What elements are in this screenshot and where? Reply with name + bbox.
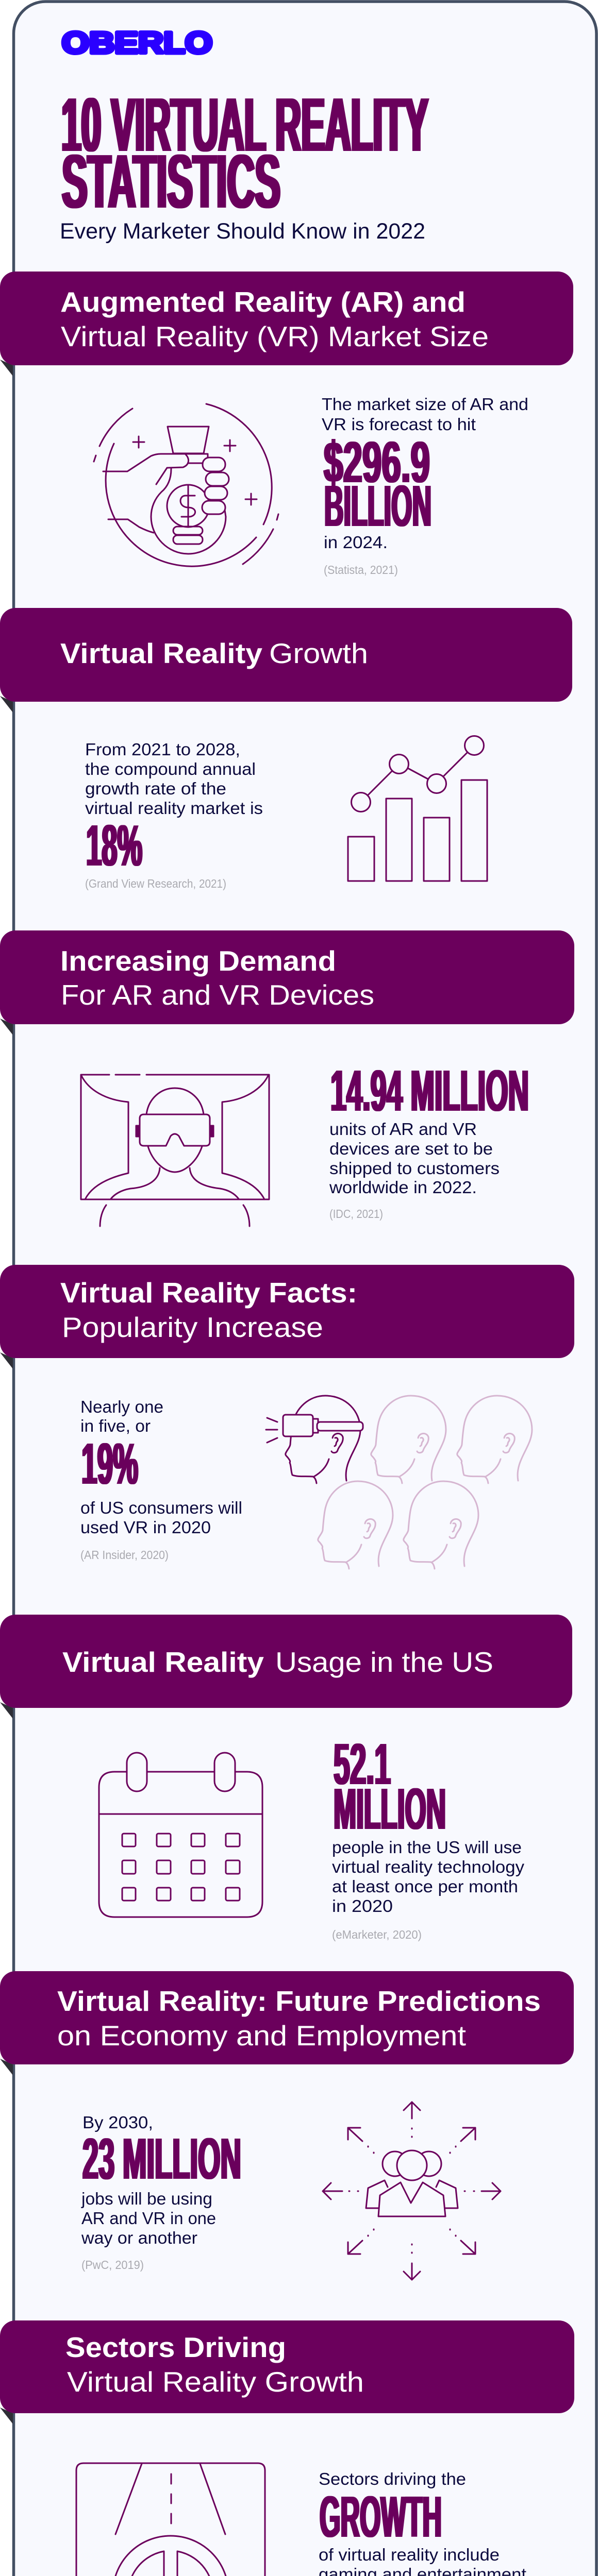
stat text: 19 percent: in five, or [80, 1416, 151, 1435]
section 1 banner: Augmented Reality (AR) and [60, 286, 466, 318]
section 7 banner [0, 2320, 574, 2424]
stat text: jobs [81, 2113, 241, 2272]
stat text: US users [332, 1732, 525, 1941]
text: 23 MILLION [82, 2126, 241, 2191]
stat text: devices: shipped to customers [329, 1159, 500, 1178]
stat text: devices: units of AR and VR [329, 1120, 477, 1139]
stat text: jobs: AR and VR in one [81, 2209, 216, 2228]
section 7 banner: Sectors Driving [65, 2331, 286, 2363]
stat text: US users: virtual reality technology [332, 1857, 525, 1876]
section 1 banner [0, 272, 573, 376]
section 3 banner [0, 930, 574, 1035]
icon: calendar [99, 1753, 262, 1917]
section 2 banner: Virtual Reality [60, 637, 262, 669]
stat text: CAGR [85, 740, 263, 890]
stat text: US users: MILLION [334, 1776, 446, 1841]
icon: group of people with radiating arrows [323, 2102, 501, 2280]
stat text: sectors: GROWTH [320, 2484, 442, 2549]
icon: person wearing VR headset in frame [81, 1075, 269, 1226]
stat text: sectors: of virtual reality include [319, 2545, 500, 2564]
title [61, 82, 428, 224]
stat text: devices: devices are set to be [329, 1139, 493, 1158]
title: STATISTICS [62, 139, 280, 224]
section 4 banner: Virtual Reality Facts: [60, 1277, 357, 1309]
icon: heads, row 1 [371, 1396, 446, 1483]
stat text: market size: The market size of AR and [322, 395, 528, 414]
stat text: market size [322, 395, 528, 577]
icon: head wearing VR headset [266, 1396, 363, 1483]
section 4 banner [0, 1265, 574, 1369]
stat text: devices: worldwide in 2022. [329, 1178, 477, 1197]
icon: hand holding money bag [94, 404, 278, 566]
section 2 banner [0, 608, 572, 713]
stat text: market size: VR is forecast to hit [322, 415, 476, 434]
stat text: market size: (Statista, 2021) [324, 563, 398, 577]
section 6 banner [0, 1971, 574, 2075]
stat text: jobs: (PwC, 2019) [81, 2258, 144, 2272]
section 6 banner: on Economy and Employment [57, 2020, 466, 2052]
stat text: CAGR: (Grand View Research, 2021) [85, 877, 226, 890]
stat text: sectors [319, 2469, 526, 2576]
stat text: market size: $296.9 [324, 430, 430, 495]
icon: bar chart with trend line [348, 736, 487, 881]
stat text: 19 percent: (AR Insider, 2020) [80, 1548, 169, 1562]
section 3 banner: Increasing Demand [60, 945, 336, 977]
stat text: 19 percent: of US consumers will [80, 1498, 242, 1517]
stat text: CAGR: the compound annual [85, 759, 256, 778]
stat text: US users: at least once per month [332, 1877, 518, 1896]
stat text: US users: people in the US will use [332, 1838, 522, 1857]
section 3 banner: For AR and VR Devices [61, 979, 374, 1011]
section 5 banner [0, 1615, 572, 1719]
stat text: market size: in 2024. [324, 533, 388, 552]
section 5 banner: Virtual Reality [62, 1646, 264, 1678]
stat text: CAGR: growth rate of the [85, 779, 226, 798]
stat text: US users: in 2020 [332, 1896, 393, 1916]
section 7 banner: Virtual Reality Growth [67, 2366, 364, 2398]
stat text: jobs: way or another [81, 2228, 197, 2247]
stat text: devices [329, 1058, 529, 1221]
stat text: devices: (IDC, 2021) [329, 1207, 383, 1221]
section 1 banner: Virtual Reality (VR) Market Size [61, 320, 489, 352]
icon: steering wheel and road [76, 2463, 265, 2576]
logo: Oberlo: OBERLO [62, 26, 212, 60]
stat text: 19 percent [80, 1397, 242, 1562]
icon: heads, row 1 second [457, 1396, 532, 1483]
stat text: sectors: Sectors driving the [319, 2469, 466, 2488]
stat text: CAGR: virtual reality market is [85, 799, 263, 818]
subtitle: Every Marketer Should Know in 2022 [60, 219, 425, 244]
icon: heads, row 2 [318, 1481, 393, 1569]
section 2 banner: Growth [269, 637, 368, 669]
stat text: 19 percent: used VR in 2020 [80, 1518, 211, 1537]
stat text: CAGR: From 2021 to 2028, [85, 740, 240, 759]
stat text: CAGR: 18% [86, 813, 142, 878]
stat text: US users: (eMarketer, 2020) [332, 1928, 422, 1941]
stat text: jobs: jobs will be using [81, 2189, 212, 2208]
stat text: 19 percent: Nearly one [80, 1397, 163, 1416]
stat text: 19 percent: 19% [81, 1431, 138, 1496]
icon: heads, row 2 second [404, 1481, 478, 1569]
stat text: jobs: By 2030, [82, 2113, 153, 2132]
section 6 banner: Virtual Reality: Future Predictions [57, 1985, 541, 2017]
section 5 banner: Usage in the US [275, 1646, 493, 1678]
section 4 banner: Popularity Increase [62, 1311, 323, 1343]
stat text: US users: 52.1 [334, 1732, 391, 1797]
stat text: market size: BILLION [324, 473, 431, 538]
